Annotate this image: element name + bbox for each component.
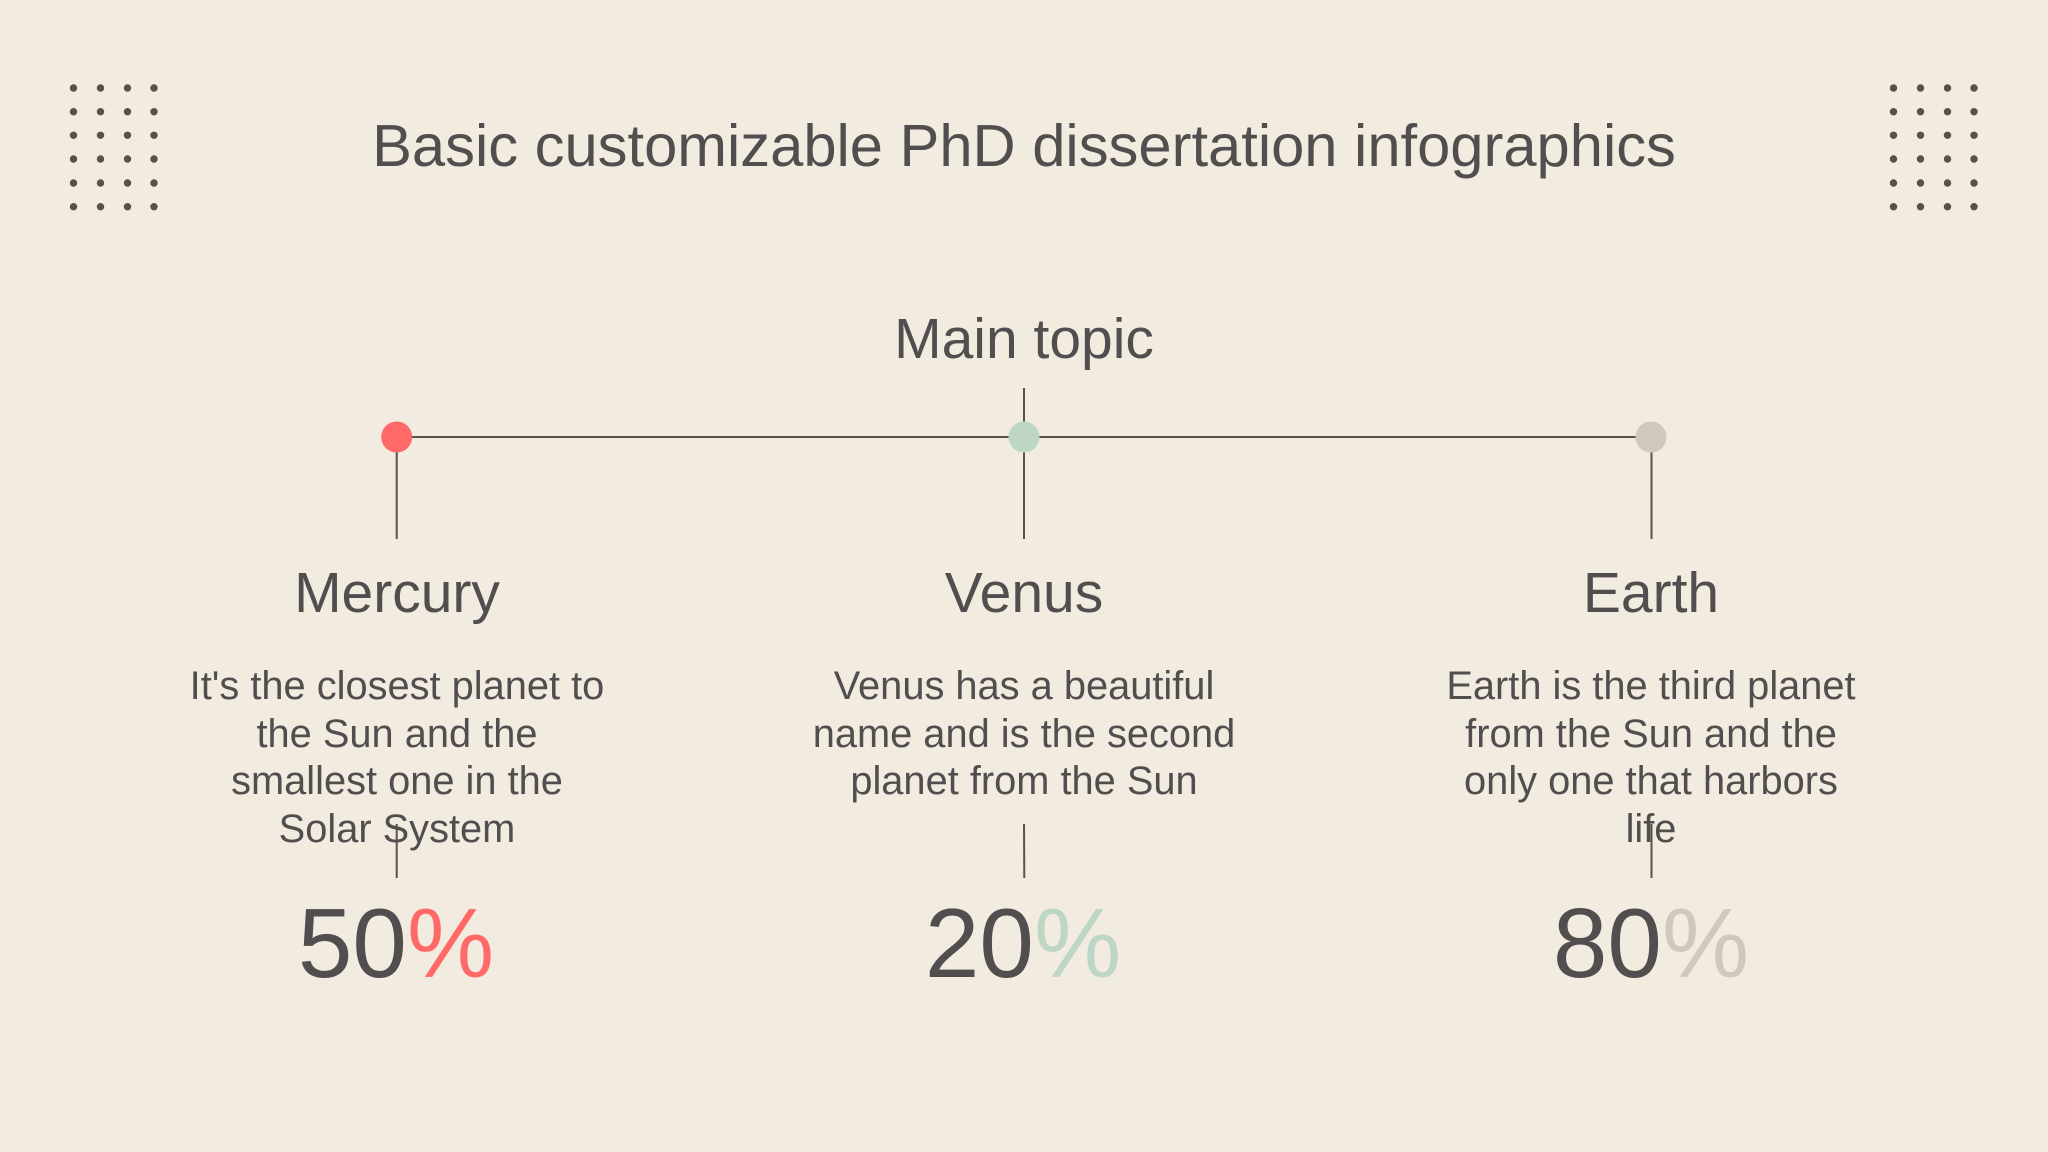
text: Earth description: from the Sun and the — [1465, 712, 1837, 756]
title: Basic customizable PhD dissertation infographics — [372, 112, 1676, 179]
connector lines — [397, 388, 1652, 878]
heading: Earth: Earth — [1583, 561, 1719, 625]
text: Earth description: life — [1626, 807, 1676, 851]
text: Earth description: Earth is the third planet — [1446, 664, 1856, 708]
text: Earth description: only one that harbors — [1464, 759, 1838, 803]
decorative dots right — [1890, 84, 1978, 210]
text: Venus description — [813, 664, 1235, 803]
text: Venus description: planet from the Sun — [850, 759, 1198, 803]
marker: Venus — [1008, 422, 1040, 452]
stat: Earth 80%: 80% — [1553, 888, 1749, 998]
marker: Earth — [1636, 422, 1666, 452]
marker: Mercury — [381, 422, 412, 452]
text: Mercury description: the Sun and the — [256, 712, 538, 756]
text: Mercury description: Solar System — [279, 807, 515, 851]
text: Earth description — [1446, 664, 1856, 851]
heading: Mercury: Mercury — [294, 561, 500, 625]
text: Mercury description — [190, 664, 604, 851]
text: Venus description: Venus has a beautiful — [834, 664, 1214, 708]
heading: Venus: Venus — [945, 561, 1103, 625]
text: Mercury description: smallest one in the — [231, 759, 563, 803]
text: Mercury description: It's the closest planet to — [190, 664, 604, 708]
stat: Venus 20%: 20% — [925, 888, 1121, 998]
decorative dots left — [70, 84, 158, 210]
text: Venus description: name and is the second — [813, 712, 1235, 756]
stat: Mercury 50%: 50% — [298, 888, 494, 998]
main topic heading: Main topic — [894, 307, 1154, 371]
